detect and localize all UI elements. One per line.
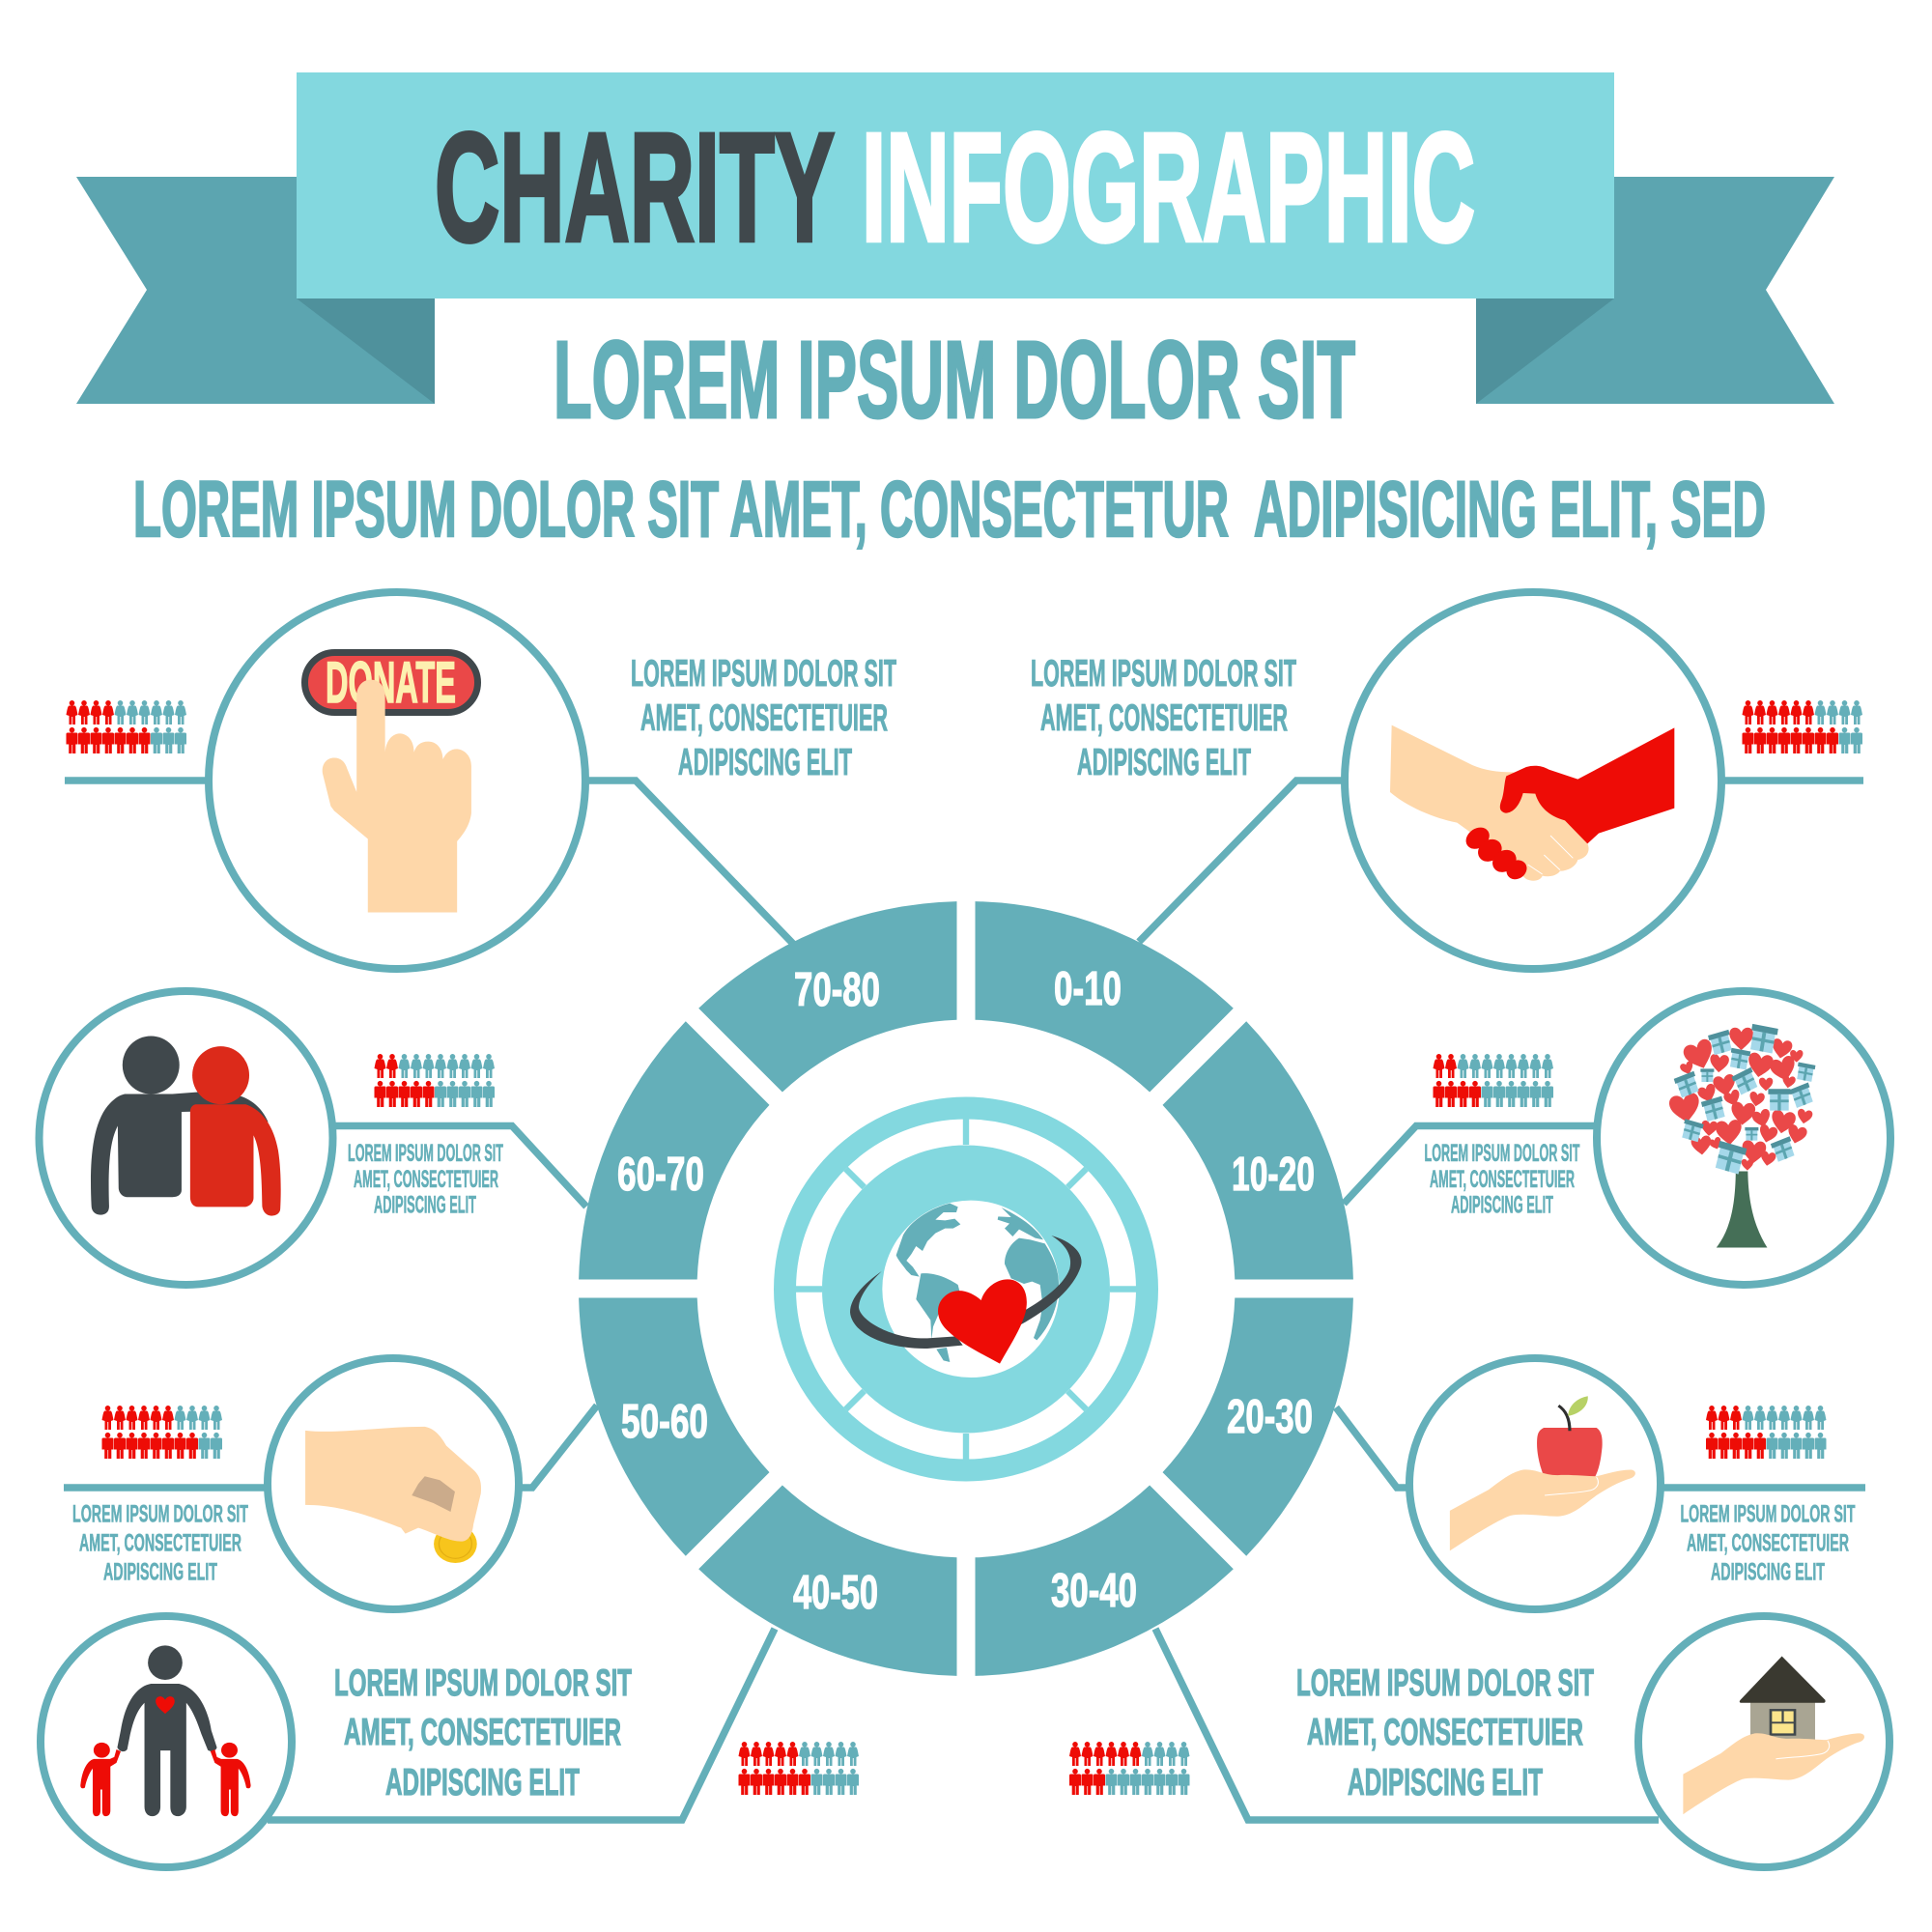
text block: ADIPISCING ELIT bbox=[1348, 1762, 1543, 1804]
coin rim bbox=[439, 1529, 471, 1558]
text block: AMET, CONSECTETUIER bbox=[1430, 1166, 1575, 1193]
subtitle: LOREM IPSUM DOLOR SIT bbox=[554, 319, 1355, 440]
circle bbox=[1345, 592, 1721, 969]
pictogram row bbox=[1706, 1406, 1826, 1459]
hearts bbox=[1668, 1028, 1813, 1171]
text block: LOREM IPSUM DOLOR SIT bbox=[1424, 1140, 1580, 1167]
thumb line bbox=[1545, 1477, 1598, 1495]
pictogram row bbox=[1434, 1054, 1553, 1107]
text block: LOREM IPSUM DOLOR SIT bbox=[631, 653, 896, 695]
window bbox=[1771, 1710, 1795, 1735]
red hand and sleeve bbox=[1500, 727, 1674, 843]
finger creases bbox=[1528, 836, 1573, 874]
hub disc bbox=[774, 1097, 1158, 1482]
orbit swoosh bbox=[850, 1236, 1082, 1349]
heart bbox=[938, 1279, 1027, 1364]
pointing hand bbox=[323, 680, 471, 912]
circle bbox=[1597, 991, 1890, 1285]
segment 10-20 bbox=[1163, 1021, 1353, 1279]
apple bbox=[1537, 1428, 1603, 1478]
circle bbox=[268, 1358, 519, 1609]
title: CHARITY bbox=[435, 100, 835, 273]
pictogram row bbox=[102, 1406, 222, 1459]
text block: LOREM IPSUM DOLOR SIT bbox=[72, 1501, 248, 1528]
segment 60-70 bbox=[579, 1021, 769, 1279]
right ribbon tail bbox=[1476, 177, 1834, 404]
left ribbon tail bbox=[76, 177, 435, 404]
segment 20-30 bbox=[1163, 1298, 1353, 1556]
text block bbox=[1296, 1662, 1594, 1804]
panel: donate bbox=[66, 592, 896, 969]
text block: AMET, CONSECTETUIER bbox=[79, 1530, 242, 1557]
centre hub rings bbox=[774, 1097, 1158, 1482]
icon: hand dropping coin bbox=[305, 1427, 481, 1563]
red fingers bbox=[1462, 823, 1530, 883]
text block: ADIPISCING ELIT bbox=[678, 742, 852, 783]
panel: gift tree bbox=[1424, 991, 1890, 1285]
segment 40-50 bbox=[698, 1486, 956, 1676]
text block: AMET, CONSECTETUIER bbox=[640, 697, 888, 739]
pictogram row bbox=[738, 1742, 859, 1795]
panel: apple bbox=[1409, 1358, 1855, 1609]
panel: house bbox=[1069, 1616, 1889, 1867]
text block bbox=[1031, 653, 1296, 783]
icon: globe with heart bbox=[850, 1201, 1082, 1378]
walls bbox=[1750, 1702, 1815, 1741]
dark person bbox=[91, 1036, 269, 1215]
text block bbox=[1681, 1501, 1855, 1586]
panel: family bbox=[41, 1616, 859, 1867]
pictogram row bbox=[1069, 1742, 1190, 1795]
pictogram row bbox=[1743, 700, 1862, 753]
coin bbox=[434, 1524, 477, 1563]
icon: hand holding house bbox=[1683, 1657, 1864, 1814]
text block bbox=[1424, 1140, 1580, 1219]
title bbox=[435, 100, 1475, 273]
segment 20-30: 20-30 bbox=[1227, 1391, 1313, 1443]
circle bbox=[1638, 1616, 1889, 1867]
text block bbox=[348, 1140, 503, 1219]
panel: coin bbox=[72, 1358, 519, 1609]
hand bbox=[305, 1427, 481, 1542]
pictogram row bbox=[66, 700, 186, 753]
globe bbox=[882, 1201, 1060, 1378]
left ribbon fold bbox=[297, 298, 435, 404]
segment 70-80: 70-80 bbox=[794, 964, 880, 1016]
right child bbox=[211, 1743, 251, 1816]
segment 50-60: 50-60 bbox=[621, 1396, 708, 1448]
leaf bbox=[1568, 1396, 1588, 1416]
segment 10-20: 10-20 bbox=[1232, 1149, 1315, 1201]
text block: AMET, CONSECTETUIER bbox=[354, 1166, 498, 1193]
red person bbox=[190, 1046, 281, 1216]
circle bbox=[41, 1616, 292, 1867]
text block: ADIPISCING ELIT bbox=[374, 1192, 476, 1219]
white ring bbox=[810, 1132, 1122, 1446]
circle bbox=[209, 592, 585, 969]
segment 30-40 bbox=[976, 1486, 1234, 1676]
circle bbox=[39, 991, 332, 1285]
hand bbox=[1683, 1733, 1864, 1814]
thumb line bbox=[1776, 1741, 1830, 1759]
continents bbox=[896, 1204, 1059, 1362]
icon: two people bbox=[91, 1036, 281, 1216]
panel: companions bbox=[39, 991, 503, 1285]
text block: ADIPISCING ELIT bbox=[1077, 742, 1251, 783]
segment 30-40: 30-40 bbox=[1051, 1565, 1137, 1617]
right ribbon fold bbox=[1476, 298, 1614, 404]
circle bbox=[1409, 1358, 1661, 1609]
panel: handshake bbox=[1031, 592, 1862, 969]
hand bbox=[1450, 1469, 1635, 1550]
text block: LOREM IPSUM DOLOR SIT bbox=[348, 1140, 503, 1167]
segment 70-80 bbox=[698, 901, 956, 1092]
cream hand bbox=[1390, 725, 1589, 881]
icon: hand holding apple bbox=[1450, 1396, 1635, 1550]
icon: adult with two children bbox=[80, 1645, 251, 1816]
text block: ADIPISCING ELIT bbox=[385, 1762, 580, 1804]
text block: ADIPISCING ELIT bbox=[1451, 1192, 1553, 1219]
stem bbox=[1558, 1406, 1570, 1431]
adult bbox=[117, 1645, 217, 1816]
ring spokes bbox=[796, 1119, 1136, 1460]
button label: DONATE bbox=[326, 650, 456, 715]
segment 0-10: 0-10 bbox=[1054, 963, 1122, 1015]
gifts bbox=[1674, 1024, 1815, 1175]
segment 0-10 bbox=[976, 901, 1234, 1092]
heart on chest bbox=[156, 1696, 175, 1714]
text block bbox=[334, 1662, 632, 1804]
segment 50-60 bbox=[579, 1298, 769, 1556]
text block: ADIPISCING ELIT bbox=[1711, 1559, 1825, 1586]
text block: ADIPISCING ELIT bbox=[103, 1559, 217, 1586]
title: INFOGRAPHIC bbox=[862, 100, 1475, 273]
text block: AMET, CONSECTETUIER bbox=[344, 1712, 621, 1753]
button bbox=[305, 653, 477, 713]
ribbon banner bbox=[76, 72, 1834, 404]
icon: donate button and hand bbox=[305, 650, 477, 912]
text block: LOREM IPSUM DOLOR SIT bbox=[1296, 1662, 1594, 1704]
wheel of age segments bbox=[579, 901, 1353, 1676]
roof bbox=[1740, 1657, 1826, 1703]
segment 60-70: 60-70 bbox=[617, 1149, 704, 1201]
pictogram row bbox=[375, 1054, 495, 1107]
trunk bbox=[1717, 1172, 1767, 1248]
left child bbox=[80, 1743, 121, 1816]
text block: AMET, CONSECTETUIER bbox=[1307, 1712, 1583, 1753]
finger shade bbox=[412, 1476, 455, 1512]
text block: LOREM IPSUM DOLOR SIT bbox=[334, 1662, 632, 1704]
banner panel bbox=[297, 72, 1614, 298]
segment 40-50: 40-50 bbox=[793, 1567, 878, 1619]
icon: tree of hearts and gifts bbox=[1668, 1024, 1815, 1248]
text block bbox=[631, 653, 896, 783]
text block: AMET, CONSECTETUIER bbox=[1040, 697, 1288, 739]
icon: handshake bbox=[1390, 725, 1674, 883]
text block bbox=[72, 1501, 248, 1586]
text block: LOREM IPSUM DOLOR SIT bbox=[1031, 653, 1296, 695]
connector lines bbox=[64, 781, 1865, 1820]
